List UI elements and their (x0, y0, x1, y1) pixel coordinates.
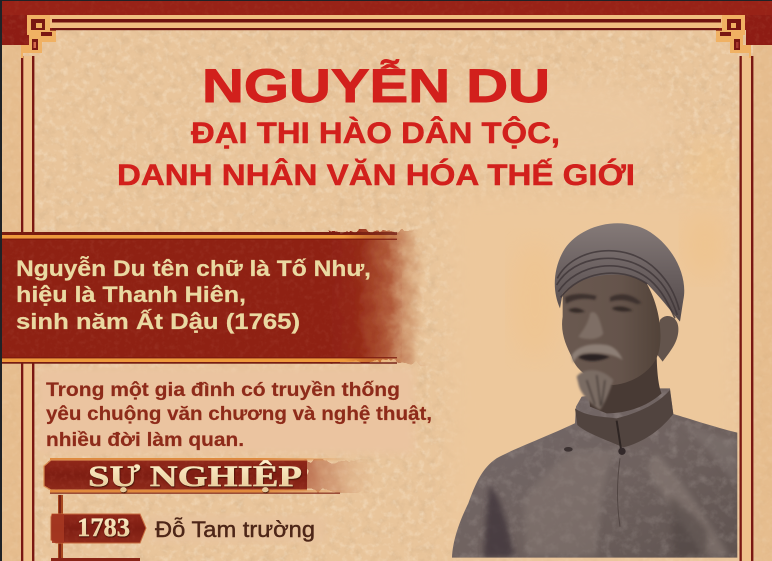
corner ornament right (716, 15, 751, 58)
banner text: Nguyễn Du tên chữ là Tố Như, (16, 256, 371, 281)
text block: family background: Trong một gia đình có truyền thống (46, 379, 400, 401)
heading: name: NGUYỄN DU (202, 59, 550, 113)
year label: 1783 (77, 513, 130, 542)
statue face (562, 274, 661, 385)
timeline item: 1783 (51, 513, 315, 543)
event label: Đỗ Tam trường (155, 517, 315, 542)
statue of Nguyễn Du (452, 223, 737, 558)
heading: career plaque (44, 458, 375, 494)
timeline item: next plaque, cut off (51, 558, 140, 561)
statue ear (655, 316, 678, 362)
career heading text: SỰ NGHIỆP (88, 460, 302, 493)
frame: top red band and corners (0, 0, 772, 45)
corner ornament left (21, 15, 56, 58)
statue turban (555, 223, 684, 322)
banner text: hiệu là Thanh Hiên, (16, 282, 246, 307)
banner text (16, 256, 371, 334)
panel: intro banner (2, 232, 425, 364)
heading: subtitle line 1: ĐẠI THI HÀO DÂN TỘC, (191, 116, 560, 150)
title (117, 59, 635, 192)
text block: family background: nhiều đời làm quan. (46, 429, 244, 451)
heading: subtitle line 2: DANH NHÂN VĂN HÓA THẾ GIỚI (117, 158, 635, 192)
banner text: sinh năm Ất Dậu (1765) (16, 309, 300, 334)
statue collar (564, 390, 673, 455)
text block: family background (46, 379, 432, 451)
timeline post (58, 495, 63, 561)
statue neck (587, 350, 662, 413)
statue facial features (565, 294, 642, 410)
text block: family background: yêu chuộng văn chương và nghệ thuật, (46, 403, 432, 425)
statue body (452, 388, 737, 558)
